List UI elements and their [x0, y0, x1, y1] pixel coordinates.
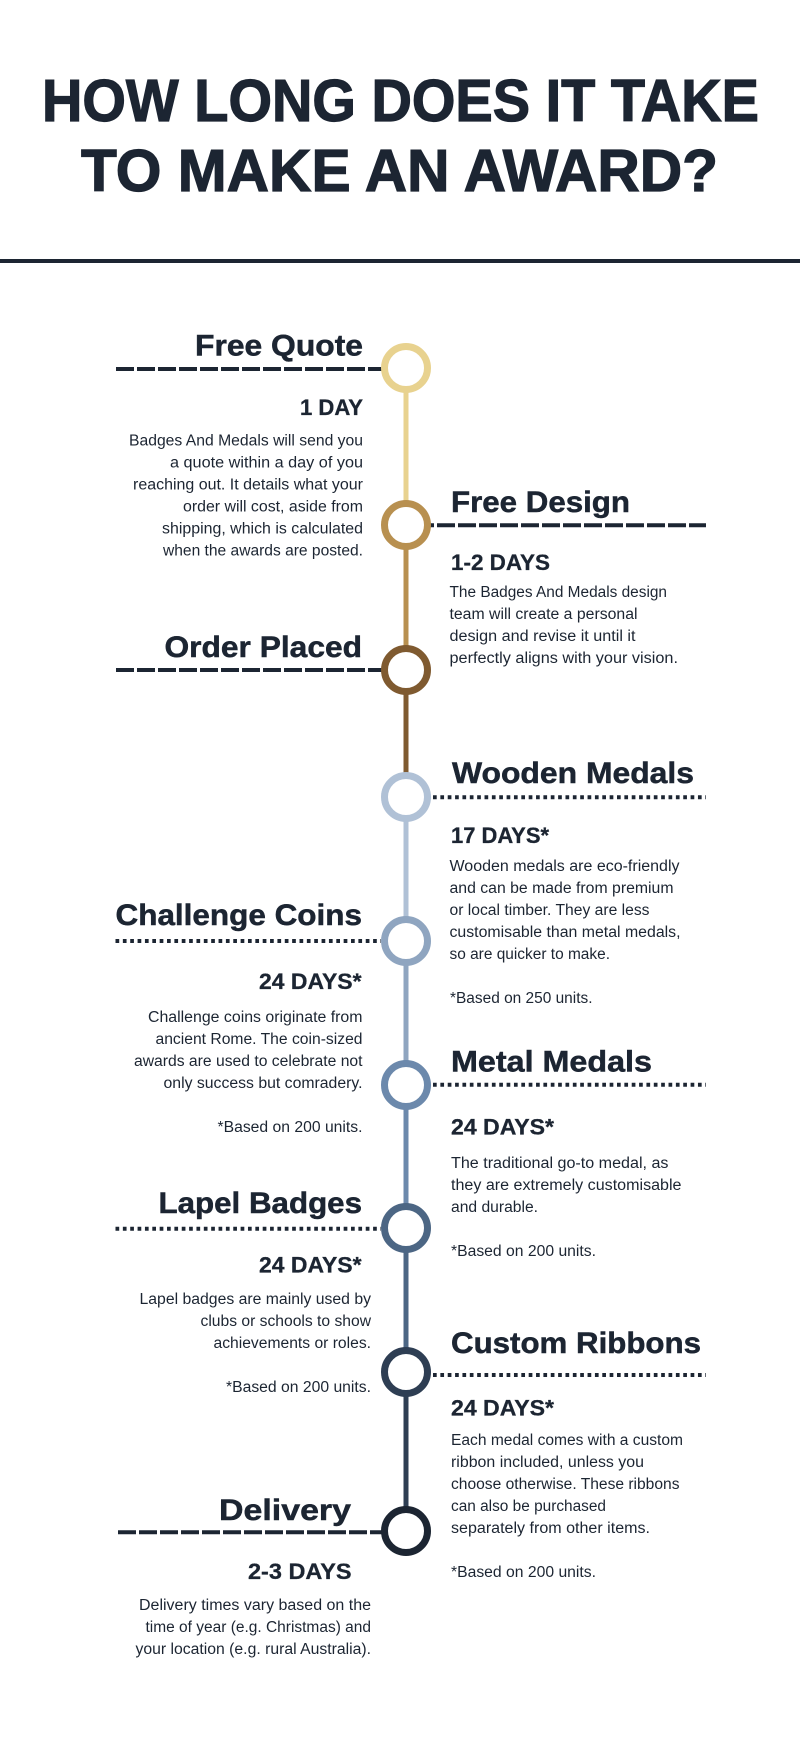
text: Free Design description: perfectly aligns with your vision. [450, 650, 678, 667]
marker: Free Quote [384, 346, 428, 390]
duration: 1-2 days: 1-2 DAYS [451, 550, 550, 575]
text: Free Quote description: when the awards are posted. [162, 542, 363, 560]
text: Delivery description [136, 1597, 371, 1658]
heading: Wooden Medals: Wooden Medals [452, 757, 694, 790]
step: Order Placed [116, 631, 428, 692]
duration: 1 day: 1 DAY [300, 395, 363, 420]
text: Free Quote description: reaching out. It details what your [133, 476, 363, 494]
step: Free Quote [116, 330, 428, 560]
step: Free Design [384, 486, 706, 667]
duration: 2-3 days: 2-3 DAYS [248, 1559, 352, 1584]
text: Metal Medals description: The traditional go-to medal, as [451, 1155, 669, 1172]
text: Delivery description: Delivery times vary based on the [139, 1597, 371, 1614]
step: Wooden Medals [384, 757, 706, 1007]
text: Wooden Medals description: Wooden medals are eco-friendly [450, 858, 680, 875]
marker: Delivery [384, 1510, 428, 1552]
step: Delivery [118, 1494, 428, 1658]
text: Challenge Coins description: ancient Rome. The coin-sized [156, 1031, 362, 1048]
title: TO MAKE AN AWARD? [81, 138, 718, 204]
step: Metal Medals [384, 1046, 706, 1260]
text: Wooden Medals description: and can be made from premium [450, 880, 674, 897]
text: Delivery description: time of year (e.g. Christmas) and [146, 1619, 371, 1636]
duration: 24 days: 24 DAYS* [259, 1252, 362, 1278]
heading: Challenge Coins: Challenge Coins [116, 899, 362, 932]
text: Wooden Medals description: so are quicker to make. [450, 946, 610, 963]
text: Challenge Coins description: *Based on 200 units. [218, 1119, 362, 1136]
text: Wooden Medals description: or local timber. They are less [450, 902, 650, 919]
text: Wooden Medals description: customisable than metal medals, [450, 924, 680, 941]
text: Metal Medals description: *Based on 200 units. [451, 1243, 596, 1260]
text: Custom Ribbons description: separately from other items. [451, 1520, 650, 1537]
timeline: connector lines [404, 368, 408, 1531]
text: Free Design description: design and revise it until it [450, 628, 636, 645]
text: Custom Ribbons description [451, 1432, 683, 1581]
duration: 24 days: 24 DAYS* [451, 1396, 554, 1420]
marker: Challenge Coins [384, 920, 428, 962]
text: Free Quote description [129, 432, 363, 560]
text: Challenge Coins description: Challenge coins originate from [148, 1009, 362, 1026]
text: Free Quote description: a quote within a day of you [170, 454, 363, 472]
text: Free Quote description: Badges And Medals will send you [129, 432, 363, 450]
text: Free Design description: team will create a personal [450, 606, 638, 623]
heading: Lapel Badges: Lapel Badges [158, 1187, 362, 1220]
step: Custom Ribbons [384, 1327, 706, 1581]
text: Lapel Badges description: clubs or schools to show [200, 1313, 372, 1330]
text: Wooden Medals description: *Based on 250 units. [450, 990, 592, 1007]
duration: 24 days: 24 DAYS* [259, 969, 362, 994]
text: Lapel Badges description: achievements or roles. [214, 1335, 371, 1352]
marker: Order Placed [384, 648, 428, 692]
heading: Metal Medals: Metal Medals [451, 1046, 652, 1078]
text: Free Design description [450, 584, 678, 667]
marker: Lapel Badges [384, 1206, 428, 1250]
title: HOW LONG DOES IT TAKE [42, 68, 759, 134]
duration: 24 days: 24 DAYS* [451, 1114, 554, 1140]
text: Custom Ribbons description: ribbon included, unless you [451, 1454, 644, 1471]
marker: Wooden Medals [384, 776, 428, 818]
duration: 17 days: 17 DAYS* [451, 823, 549, 848]
text: Free Design description: The Badges And Medals design [450, 584, 667, 601]
title [42, 68, 759, 204]
heading: Free Design: Free Design [451, 486, 630, 519]
heading: Custom Ribbons: Custom Ribbons [451, 1327, 701, 1360]
step: Lapel Badges [116, 1187, 428, 1396]
heading: Delivery: Delivery [219, 1494, 351, 1527]
text: Metal Medals description [451, 1155, 682, 1260]
heading: Order Placed: Order Placed [164, 631, 362, 664]
text: Custom Ribbons description: Each medal comes with a custom [451, 1432, 683, 1449]
marker: Free Design [384, 504, 428, 546]
text: Challenge Coins description: awards are used to celebrate not [134, 1053, 363, 1070]
text: Free Quote description: order will cost, aside from [183, 498, 363, 516]
marker: Custom Ribbons [384, 1350, 428, 1394]
marker: Metal Medals [384, 1064, 428, 1106]
text: Metal Medals description: and durable. [451, 1199, 538, 1216]
text: Wooden Medals description [450, 858, 680, 1007]
text: Custom Ribbons description: choose otherwise. These ribbons [451, 1476, 680, 1493]
text: Custom Ribbons description: can also be purchased [451, 1498, 606, 1515]
text: Lapel Badges description [140, 1291, 372, 1396]
text: Metal Medals description: they are extremely customisable [451, 1177, 682, 1194]
text: Challenge Coins description: only success but comradery. [164, 1075, 362, 1092]
text: Free Quote description: shipping, which is calculated [162, 520, 363, 538]
step: Challenge Coins [116, 899, 428, 1136]
text: Lapel Badges description: *Based on 200 units. [226, 1379, 371, 1396]
heading: Free Quote: Free Quote [195, 330, 363, 362]
text: Lapel Badges description: Lapel badges are mainly used by [140, 1291, 371, 1308]
text: Challenge Coins description [134, 1009, 363, 1136]
text: Custom Ribbons description: *Based on 200 units. [451, 1564, 596, 1581]
text: Delivery description: your location (e.g. rural Australia). [136, 1641, 371, 1658]
